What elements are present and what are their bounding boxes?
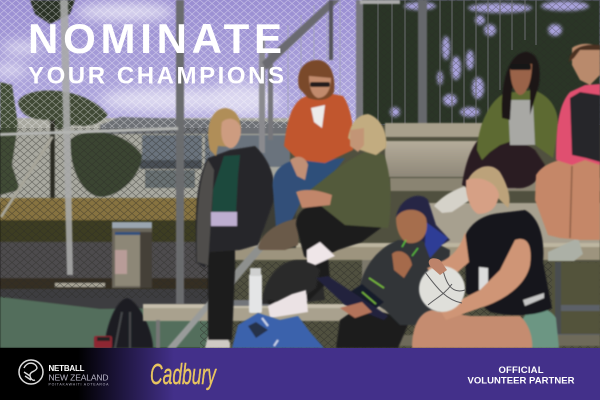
headline <box>28 15 284 90</box>
dark underside behind benches <box>262 193 296 248</box>
logo text: Netball New Zealand <box>48 364 109 386</box>
dark tree behind right stand <box>362 0 600 125</box>
sky with clouds <box>0 0 600 130</box>
water bottle <box>249 268 262 313</box>
icon: Netball New Zealand emblem <box>19 360 43 384</box>
person: blonde player with netball <box>412 166 559 348</box>
logo text: Cadbury: Cadbury <box>150 359 217 391</box>
heading: NOMINATE: NOMINATE <box>28 15 282 62</box>
base behind stand <box>200 125 600 348</box>
person: woman in pink vest <box>535 44 600 261</box>
sky gaps through tree <box>390 1 589 117</box>
person: blonde woman in black jacket <box>196 108 275 348</box>
person: woman in orange jacket and jeans <box>273 60 354 228</box>
person: woman in green sweater <box>267 114 391 318</box>
logo text: Netball New Zealand: NETBALL <box>48 364 85 373</box>
blue sports bag <box>232 313 324 348</box>
distant trees and building <box>0 0 290 205</box>
person: woman in olive jacket <box>434 52 558 213</box>
logo text: Netball New Zealand: NEW ZEALAND <box>48 372 108 382</box>
rubbish bin <box>112 222 152 288</box>
fence posts and rails <box>0 0 427 304</box>
bleacher stand <box>143 123 600 348</box>
backpack under bench <box>262 260 325 304</box>
netball <box>419 258 465 312</box>
grass, hedge, road and court <box>0 198 210 348</box>
heading: YOUR CHAMPIONS: YOUR CHAMPIONS <box>28 62 284 90</box>
backpack and bottle <box>94 298 153 348</box>
footer band <box>0 348 600 400</box>
person: woman with blue hair and clipboard <box>316 196 450 348</box>
partner label: OFFICIAL <box>498 365 544 376</box>
gym bag on bench <box>258 218 300 250</box>
partner label <box>468 365 575 386</box>
logo text: Netball New Zealand: POITAKAWHITI AOTEAROA <box>48 382 109 386</box>
partner label: VOLUNTEER PARTNER <box>468 376 575 386</box>
